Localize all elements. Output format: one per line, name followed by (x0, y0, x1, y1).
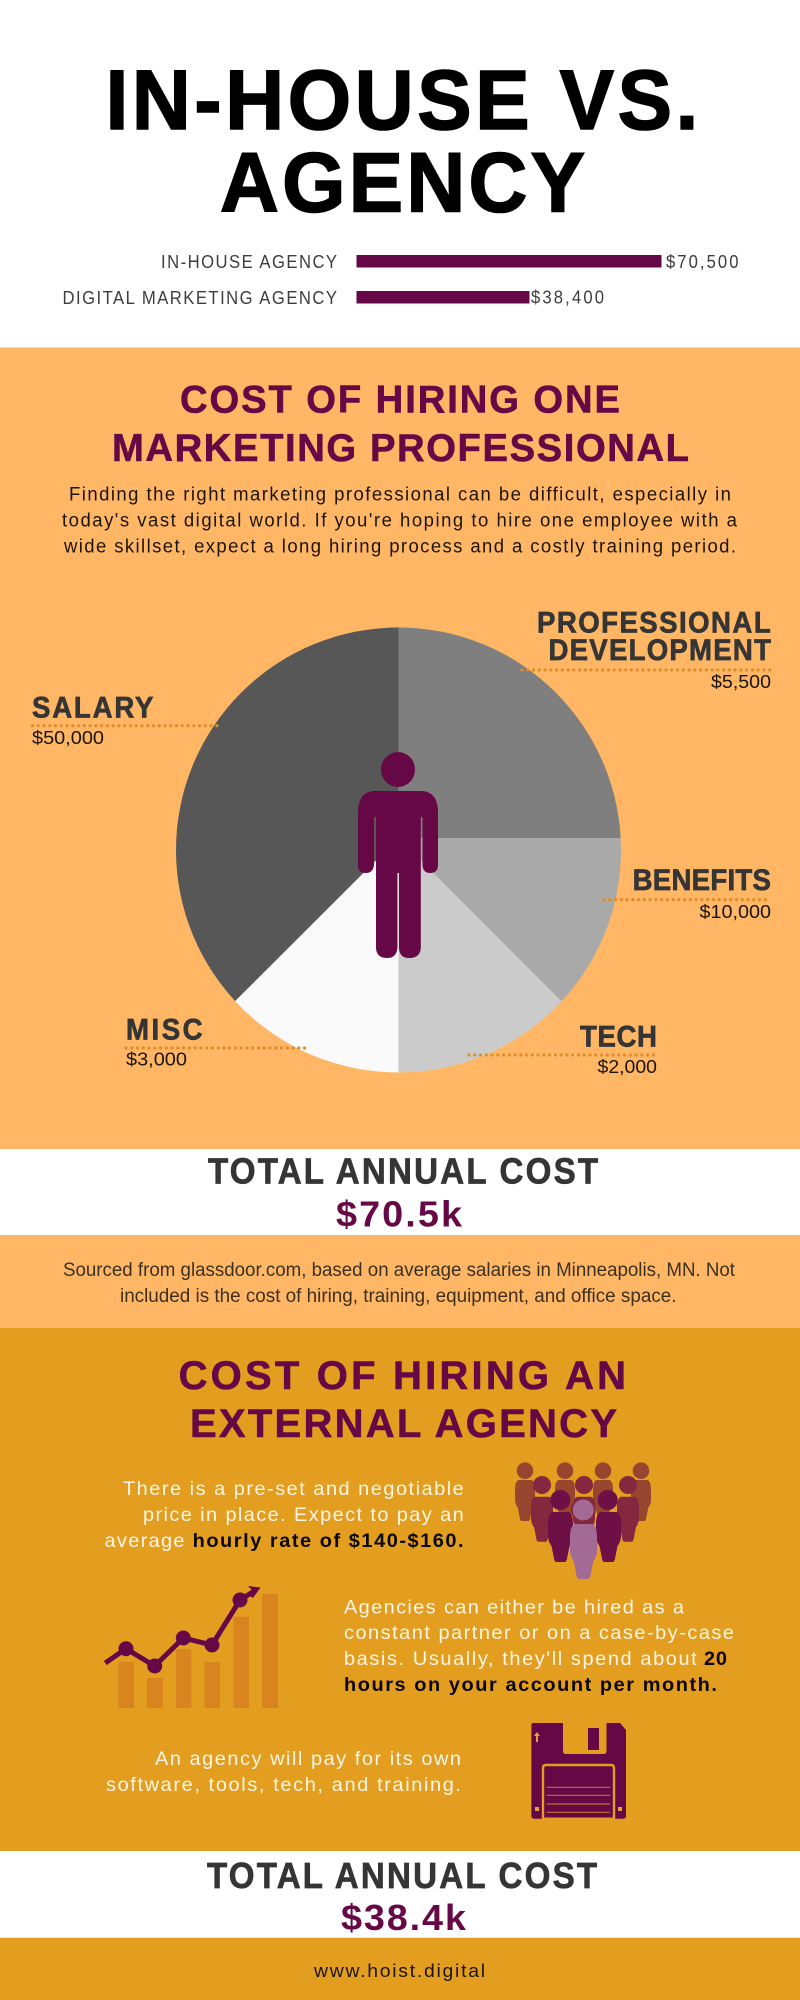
text: hours per month: Agencies can either be hired as a (344, 1597, 684, 1618)
callout: tech: TECH (580, 1020, 657, 1054)
panel: cost of hiring one marketing professional (0, 348, 800, 1149)
bar row: in-house agency (161, 251, 739, 272)
panel: total annual cost in-house (0, 1149, 800, 1235)
heading: cost of hiring one marketing professional: MARKETING PROFESSIONAL (112, 427, 689, 470)
bar row: digital marketing agency (62, 287, 604, 308)
title (106, 53, 698, 230)
slice: salary (176, 628, 398, 1002)
slice: misc (235, 860, 398, 1072)
callout: benefits (604, 864, 771, 922)
icon: growth chart (105, 1586, 278, 1708)
text: software and tools (106, 1748, 461, 1796)
callout: professional development: PROFESSIONAL (537, 606, 771, 640)
text: hourly rate: price in place. Expect to pay an (143, 1504, 464, 1526)
text: hours per month: constant partner or on a case-by-case (344, 1622, 734, 1644)
heading: cost of hiring an external agency: COST OF HIRING AN (179, 1354, 626, 1398)
callout: benefits: $10,000 (700, 901, 771, 922)
callout: professional development (522, 606, 771, 692)
callout: salary: SALARY (32, 691, 153, 725)
trend line (105, 1586, 260, 1674)
text: software and tools: An agency will pay for its own (155, 1748, 461, 1770)
intro paragraph (62, 484, 737, 558)
panel: source note (0, 1235, 800, 1328)
bars (118, 1594, 278, 1708)
callout: professional development: $5,500 (711, 671, 771, 692)
footer: website (0, 1938, 800, 2000)
footer: website: www.hoist.digital (313, 1961, 485, 1982)
heading: cost of hiring an external agency: EXTERNAL AGENCY (190, 1402, 617, 1446)
callout: misc (126, 1014, 307, 1070)
bar chart: annual cost comparison (62, 251, 739, 308)
panel: cost of hiring an external agency (0, 1328, 800, 1851)
text: hourly rate: average (104, 1530, 185, 1552)
third row (548, 1490, 621, 1562)
slice: benefits (420, 838, 621, 1002)
text: hours per month: 20 (704, 1648, 727, 1670)
background: white header (0, 0, 800, 348)
callout: misc: MISC (126, 1014, 203, 1047)
icon: floppy disk (531, 1723, 626, 1819)
text: hours per month: basis. Usually, they'll spend about (344, 1648, 697, 1670)
callout: salary: $50,000 (32, 727, 104, 748)
callout: tech (469, 1020, 657, 1077)
text: hourly rate (104, 1478, 464, 1552)
callout: misc: $3,000 (126, 1049, 187, 1070)
front figure (570, 1498, 597, 1579)
intro paragraph: today's vast digital world. If you're hoping to hire one employee with a (62, 510, 737, 532)
panel: source note: included is the cost of hiring, training, equipment, and office space. (120, 1286, 676, 1307)
bar row: in-house agency: $70,500 (666, 251, 739, 272)
back row (515, 1462, 651, 1521)
bar row: in-house agency: IN-HOUSE AGENCY (161, 251, 337, 272)
panel: total annual cost in-house: $70.5k (336, 1195, 462, 1235)
intro paragraph: Finding the right marketing professional can be difficult, especially in (69, 484, 731, 506)
callout: tech: $2,000 (598, 1056, 657, 1077)
heading: cost of hiring one marketing professional: COST OF HIRING ONE (180, 378, 620, 422)
slice: tech (398, 860, 562, 1072)
text: software and tools: software, tools, tech, and training. (106, 1774, 461, 1796)
bar row: digital marketing agency: DIGITAL MARKETING AGENCY (62, 287, 337, 308)
bar row: digital marketing agency: $38,400 (531, 287, 604, 308)
pie chart: cost breakdown (176, 628, 621, 1072)
intro paragraph: wide skillset, expect a long hiring process and a costly training period. (63, 536, 736, 558)
panel: total annual cost agency: $38.4k (341, 1898, 466, 1938)
text: hours per month (344, 1597, 734, 1696)
title: AGENCY (220, 135, 585, 230)
title: IN-HOUSE VS. (106, 53, 698, 147)
text: hourly rate: There is a pre-set and negotiable (123, 1478, 464, 1500)
panel: total annual cost agency (0, 1851, 800, 1938)
second row (531, 1476, 639, 1542)
text: hours per month: hours on your account per month. (344, 1674, 717, 1696)
panel: source note: Sourced from glassdoor.com, based on average salaries in Minneapolis, MN. Not (63, 1260, 736, 1281)
slice: professional development (398, 628, 621, 838)
text: hourly rate: hourly rate of $140-$160. (193, 1530, 464, 1552)
icon: group of people (515, 1462, 651, 1579)
panel: total annual cost agency: TOTAL ANNUAL COST (207, 1857, 597, 1896)
callout: salary (32, 691, 220, 748)
heading: cost of hiring an external agency (179, 1354, 626, 1446)
callout: benefits: BENEFITS (633, 864, 771, 897)
heading: cost of hiring one marketing professional (112, 378, 689, 470)
icon: person silhouette (358, 752, 438, 958)
callout: professional development: DEVELOPMENT (548, 634, 771, 667)
panel: total annual cost in-house: TOTAL ANNUAL COST (208, 1152, 598, 1192)
